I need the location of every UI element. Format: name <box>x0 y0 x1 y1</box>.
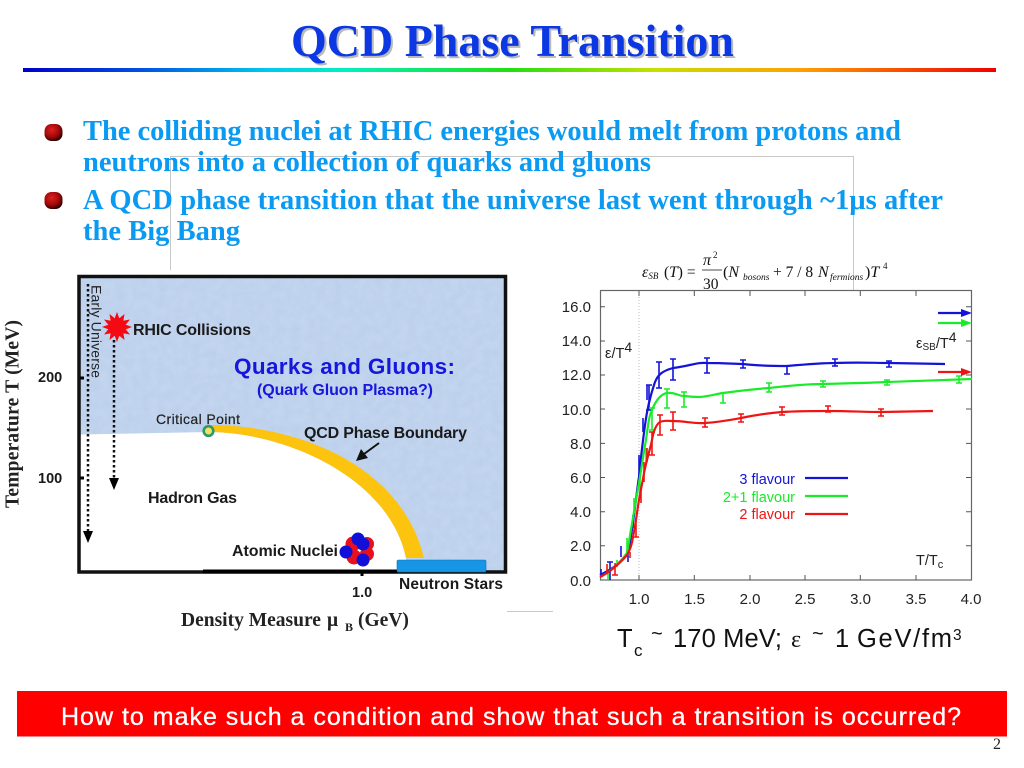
x tick labels <box>629 591 981 608</box>
bullet icon 1 <box>44 124 62 141</box>
y tick labels: 6.0 <box>570 470 591 487</box>
boundary arrow <box>356 443 379 461</box>
early universe arrow <box>83 284 93 543</box>
formula: 30 <box>703 276 719 293</box>
frame <box>79 276 506 572</box>
critical values line: ~ <box>812 623 824 645</box>
formula: + 7 / 8 <box>773 264 813 281</box>
legend: 3 flavour <box>739 472 795 488</box>
formula: fermions <box>830 272 864 283</box>
nuclei label: Atomic Nuclei <box>232 543 338 560</box>
y axis label: 4 <box>624 339 632 355</box>
series: 2+1 flavour <box>600 376 972 580</box>
formula: N <box>817 264 830 281</box>
plot frame <box>600 290 972 580</box>
bullet icon 2 <box>44 192 62 209</box>
y tick 200: 200 <box>38 370 62 386</box>
critical values line: 1 <box>835 625 849 653</box>
y tick labels: 2.0 <box>570 538 591 555</box>
formula: 4 <box>883 261 888 271</box>
y tick labels: 14.0 <box>562 333 591 350</box>
y tick labels: 12.0 <box>562 367 591 384</box>
hadron gas label: Hadron Gas <box>148 490 237 507</box>
y tick labels: 4.0 <box>570 504 591 521</box>
SB label: ε <box>916 336 922 352</box>
legend: 2 flavour <box>739 507 795 523</box>
plasma background <box>80 277 504 572</box>
SB label: /T <box>936 336 949 352</box>
axis ticks <box>80 378 362 576</box>
SB label: SB <box>922 342 936 353</box>
x axis title <box>181 610 409 634</box>
SB label: 4 <box>949 329 957 345</box>
y tick labels: 16.0 <box>562 299 591 316</box>
y axis label: ε/T <box>605 346 624 362</box>
formula: (N <box>723 264 740 281</box>
boundary label: QCD Phase Boundary <box>304 425 467 442</box>
formula: ε <box>642 264 648 281</box>
legend: 2+1 flavour <box>723 490 795 506</box>
y tick labels <box>562 299 591 590</box>
series: 3 flavour <box>600 358 945 580</box>
phase diagram <box>2 276 506 634</box>
x tick labels: 3.0 <box>850 591 871 608</box>
x tick labels: 4.0 <box>961 591 981 608</box>
title: QCD Phase Transition <box>293 17 736 68</box>
neutron stars label: Neutron Stars <box>399 576 503 593</box>
x axis label: T/T <box>916 553 938 569</box>
critical values line: T <box>617 625 633 653</box>
legend <box>723 472 848 523</box>
y tick labels: 8.0 <box>570 436 591 453</box>
critical values line: 3 <box>953 627 962 644</box>
series: 2 flavour <box>600 406 933 577</box>
neutron star slab <box>397 560 486 572</box>
formula: SB <box>648 271 659 281</box>
energy density chart <box>562 290 981 608</box>
x axis title: μ <box>327 610 338 631</box>
x axis label: c <box>938 559 944 571</box>
rainbow rule <box>23 68 996 72</box>
bullet 2 line 1: A QCD phase transition that the universe last went through ~1μs after <box>83 185 943 216</box>
critical values line: 170 MeV; <box>673 625 782 653</box>
x tick labels: 2.0 <box>740 591 760 608</box>
SB limit arrows <box>938 309 972 376</box>
phase boundary band <box>210 425 424 558</box>
critical values line: GeV/fm <box>857 625 952 653</box>
rhic label: RHIC Collisions <box>133 322 251 339</box>
qgp subheading: (Quark Gluon Plasma?) <box>257 382 433 399</box>
quarks heading: Quarks and Gluons: <box>234 354 455 379</box>
x tick labels: 1.0 <box>629 591 649 608</box>
critical point marker <box>204 426 213 436</box>
bullet 1 line 2: neutrons into a collection of quarks and gluons <box>83 147 651 178</box>
y axis title: Temperature T (MeV) <box>2 320 24 508</box>
formula: (T) = <box>664 264 696 281</box>
formula: 2 <box>713 250 718 260</box>
critical values line: ~ <box>651 623 663 645</box>
icon: collision star <box>102 312 132 342</box>
x tick label: 1.0 <box>352 585 372 601</box>
icon: nucleus <box>340 532 374 566</box>
critical values line <box>617 623 962 660</box>
question banner <box>17 691 1007 736</box>
formula: bosons <box>743 273 770 283</box>
x axis title: (GeV) <box>358 610 409 631</box>
formula <box>642 250 888 293</box>
page number: 2 <box>993 736 1001 753</box>
y tick 100: 100 <box>38 471 62 487</box>
question text: How to make such a condition and show that such a transition is occurred? <box>61 703 961 731</box>
y tick labels: 10.0 <box>562 402 591 419</box>
x tick labels: 3.5 <box>906 591 926 608</box>
x axis title: Density Measure <box>181 610 321 631</box>
x tick labels: 1.5 <box>684 591 705 608</box>
early universe label: Early Universe <box>88 285 104 378</box>
formula: )T <box>865 264 880 281</box>
x tick labels: 2.5 <box>795 591 815 608</box>
formula: π <box>703 252 712 269</box>
bullet list <box>44 116 943 247</box>
critical values line: c <box>634 641 643 660</box>
hadron region <box>80 432 406 572</box>
x axis title: B <box>345 620 353 634</box>
title: QCD Phase Transition <box>291 15 734 66</box>
rhic arrow <box>109 340 119 490</box>
y tick labels: 0.0 <box>570 573 591 590</box>
critical point label: Critical Point <box>156 411 240 427</box>
critical values line: ε <box>791 627 801 653</box>
bullet 1 line 1: The colliding nuclei at RHIC energies would melt from protons and <box>83 116 901 147</box>
bullet 2 line 2: the Big Bang <box>83 216 240 247</box>
